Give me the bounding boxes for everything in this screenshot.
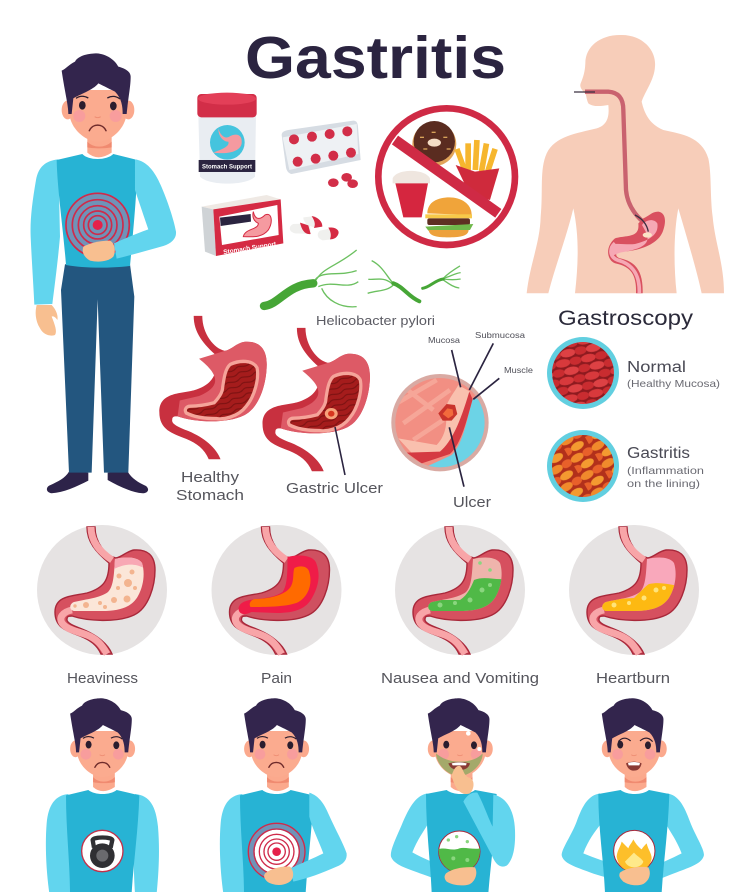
medicine box and capsules: Stomach Support [223,241,278,256]
person: heartburn [562,698,704,892]
jar: Stomach Support [197,93,257,184]
label: Heaviness: Heaviness [67,671,138,687]
head [62,53,134,157]
mucosa circle: gastritis [547,430,619,502]
hand on belly [83,241,115,262]
esophagus and stomach [585,92,665,293]
person: heaviness [46,698,159,892]
label: Muscle: Muscle [504,366,534,375]
nauseous green face [436,753,483,776]
pain target [248,823,306,881]
title: Gastritis [245,25,506,91]
gastric ulcer stomach illustration [263,328,370,471]
left sleeve [31,159,60,305]
arrow to gastric ulcer [335,427,345,475]
icon: kettlebell [82,830,123,872]
prohibition ring and bar [378,108,515,245]
stomach wall cross section [390,343,499,487]
arrows to layers [449,343,499,487]
heading: Gastroscopy: Gastroscopy [558,307,694,330]
label: Nausea and Vomiting: Nausea and Vomiting [381,671,539,687]
icon: green stomach contents [439,831,480,872]
icon: flames [614,830,655,872]
label: Normal: Normal [627,359,686,376]
trousers [61,264,134,473]
drink cup [393,171,430,217]
fries [454,140,499,200]
symptom circle: pain [212,525,342,655]
blister pack and pills [282,121,361,188]
symptom circle: nausea and vomiting [395,525,525,655]
label: Healthy Stomach: Healthy [181,470,240,486]
shoes [47,472,148,493]
label: Inflammation on the lining: on the lining) [627,478,700,490]
right sleeve [114,159,176,259]
label: Healthy Mucosa: (Healthy Mucosa) [627,378,720,390]
label: Ulcer: Ulcer [453,495,491,511]
label: Heartburn: Heartburn [596,671,670,687]
person: nausea and vomiting [391,698,515,892]
left hand [36,305,58,336]
label: Gastritis: Gastritis [627,445,690,462]
label: Healthy Stomach: Stomach [176,488,244,504]
no junk food sign [378,108,515,245]
symptom circle: heartburn [569,525,699,655]
label: Healthy Stomach [176,470,244,504]
label: Inflammation on the lining [627,465,704,490]
label: Gastric Ulcer: Gastric Ulcer [286,481,383,497]
label: Inflammation on the lining: (Inflammation [627,465,704,477]
label: Pain: Pain [261,671,292,687]
label: Mucosa: Mucosa [428,336,461,345]
label: Helicobacter pylori: Helicobacter pylori [316,314,435,328]
mucosa circle: normal [547,337,619,409]
healthy stomach illustration [159,316,267,459]
label: Submucosa: Submucosa [475,331,526,340]
jar: Stomach Support: Stomach Support [202,163,253,170]
ulcer spot [325,408,338,419]
person: pain [220,698,347,892]
silhouette [527,35,724,293]
torso [57,154,137,268]
donut [412,121,456,166]
burger [425,197,473,237]
pain target [65,192,130,258]
symptom circle: heaviness [37,525,167,655]
figure: main man with stomach pain [31,53,176,493]
bacteria: Helicobacter pylori [264,250,461,307]
gastroscope tube [574,92,648,232]
gastroscopy body illustration [527,35,724,293]
medicine box and capsules [202,195,339,256]
